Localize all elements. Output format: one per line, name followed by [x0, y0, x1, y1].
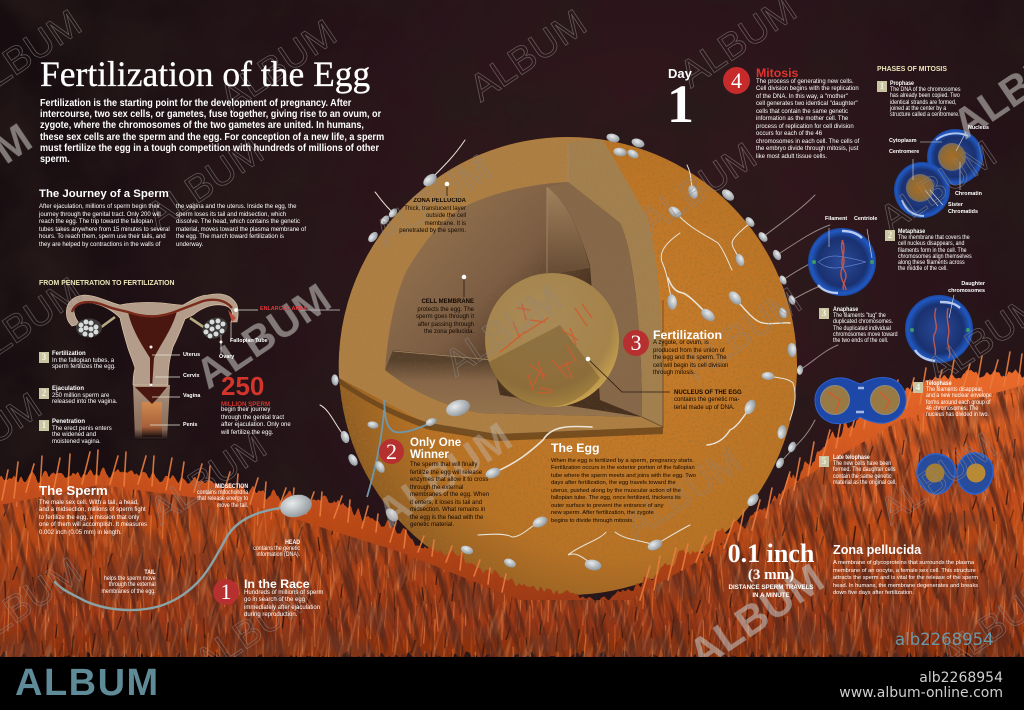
- label: midsection: contains mitochondria: [197, 489, 248, 496]
- day counter: Day: [668, 66, 692, 81]
- fertilization text: [653, 340, 728, 376]
- sperm text: and a midsection, millions of sperm fight: [39, 507, 146, 513]
- egg text: uterus, pushed along by the muscular action of the: [551, 488, 681, 494]
- watermark outlines: ALBUM: [677, 280, 809, 388]
- cell diagram: metaphase: [808, 228, 876, 296]
- in the race text: [244, 590, 323, 618]
- fertilization text: through mitosis.: [653, 370, 695, 376]
- mitosis text: The process of generating new cells.: [756, 78, 854, 84]
- fertilization text: produced from the union of: [653, 348, 725, 354]
- step 2: 250 million sperm are: [52, 392, 109, 398]
- step 2: Ejaculation: [52, 386, 84, 392]
- winner text: through the external: [410, 484, 463, 490]
- phase 4 telophase: The filaments disappear,: [926, 386, 983, 393]
- heading: mitosis: Mitosis: [756, 66, 798, 80]
- egg text: fallopian tube. The egg, once fertilized, thickens its: [551, 495, 681, 501]
- step 1: 1: [42, 420, 46, 430]
- text: Vagina: [183, 393, 200, 399]
- watermark outlines: ALBUM: [872, 133, 1004, 241]
- sperm text: 0.002 inch (0.05 mm) in length.: [39, 530, 122, 536]
- number 4: 4: [731, 68, 742, 93]
- heading: fertilization: Fertilization: [653, 328, 722, 342]
- phase 3 anaphase: the two ends of the cell.: [833, 337, 888, 344]
- nucleus label: [674, 390, 742, 410]
- step 2: released into the vagina.: [52, 399, 117, 405]
- phase 5 late telophase: The new cells have been: [833, 460, 891, 467]
- phase 3 anaphase: duplicated chromosomes.: [833, 318, 893, 325]
- journey text column 2: the egg. The march toward fertilization is: [176, 234, 284, 240]
- number 2: 2: [386, 439, 397, 464]
- phase 4 telophase: and a new nuclear envelope: [926, 392, 992, 399]
- watermark outlines: ALBUM: [617, 440, 749, 548]
- egg text: days after fertilization, the egg travels toward the: [551, 480, 676, 486]
- label: daughter chromosomes: Daughter: [961, 281, 985, 287]
- phase 1 prophase: 1: [880, 81, 884, 91]
- stat: 0.1 inch: IN A MINUTE: [752, 592, 790, 598]
- day counter: 1: [667, 74, 694, 134]
- zona pellucida text: head. In humans, the membrane degenerates and breaks: [833, 582, 978, 588]
- label: midsection: move the tail.: [217, 502, 248, 509]
- intro text: these sex cells are the sperm and the egg. For conception of a new life, a sperm: [40, 132, 384, 143]
- cell membrane label: [416, 298, 474, 335]
- phase 5 late telophase: material as the original cell.: [833, 479, 897, 486]
- footer band: [0, 657, 1024, 710]
- heading: the egg: The Egg: [551, 441, 600, 455]
- large sperm: [55, 492, 314, 610]
- phase 2 metaphase: The membrane that covers the: [898, 234, 970, 241]
- phase 1 prophase: structure called a centromere.: [890, 111, 960, 118]
- label: head: [253, 539, 300, 558]
- heading: only one winner: Only One: [410, 437, 461, 449]
- stat: 0.1 inch: [728, 539, 814, 598]
- number 2: [379, 439, 404, 464]
- zona pellucida label: penetrated by the sperm.: [399, 228, 466, 234]
- egg text: outer surface to prevent the entrance of any: [551, 502, 663, 508]
- label: head: HEAD: [285, 539, 300, 546]
- orange fur field: [0, 352, 1024, 673]
- phase 1 prophase: The DNA of the chromosomes: [890, 86, 960, 93]
- stat: 250 million sperm: after ejaculation. Only one: [221, 422, 291, 428]
- nucleus label: terial made up of DNA.: [674, 404, 735, 410]
- intro text: intercourse, two sex cells, or gametes, fuse together, giving rise to an ovum, or: [40, 109, 381, 120]
- phase 1 prophase: Prophase: [890, 80, 914, 87]
- image id overlay: alb2268954: [895, 630, 994, 649]
- watermark outlines: ALBUM: [187, 576, 319, 684]
- in the race text: immediately after ejaculation: [244, 604, 320, 610]
- cell membrane label: the zona pellucida.: [424, 329, 474, 335]
- number 3: [623, 330, 649, 356]
- text: Chromatin: [955, 191, 982, 197]
- phase 3 anaphase: Anaphase: [833, 306, 858, 313]
- heading: penetration to fertilization: FROM PENETRATION TO FERTILIZATION: [39, 280, 175, 287]
- journey text column 2: [176, 204, 306, 248]
- zona pellucida text: A membrane of glycoproteins that surrounds the plasma: [833, 560, 974, 566]
- phase 2 metaphase: filaments form in the cell. The: [898, 247, 967, 254]
- text: Cervix: [183, 373, 199, 379]
- cell labels: Nucleus: [968, 125, 989, 131]
- journey text column 2: dissolve. The head, which contains the genetic: [176, 219, 300, 225]
- anatomy labels: Uterus: [183, 352, 200, 358]
- watermark outlines: ALBUM: [142, 425, 274, 533]
- zona pellucida label: membrane. It is: [425, 220, 466, 226]
- heading: zona pellucida: Zona pellucida: [833, 543, 921, 557]
- phase 3 anaphase: [819, 306, 898, 344]
- egg text: tube where the sperm meets and joins with the egg. Two: [551, 472, 696, 478]
- text: Chromatids: [948, 208, 978, 214]
- cell diagram: anaphase: [905, 295, 973, 363]
- label: head: contains the genetic: [253, 545, 300, 552]
- step 1: The erect penis enters: [52, 426, 112, 432]
- zona pellucida label: ZONA PELLUCIDA: [413, 198, 466, 204]
- zona pellucida text: membrane of an oocyte, a female sex cell. This structure: [833, 568, 976, 574]
- label: midsection: that release energy to: [197, 495, 248, 502]
- mitosis text: the embryo divide through mitosis, just: [756, 146, 858, 152]
- nucleus with chromosomes: [485, 273, 619, 407]
- nucleus label: NUCLEUS OF THE EGG: [674, 390, 742, 396]
- text: Centriole: [854, 216, 877, 222]
- step 1: Penetration: [52, 419, 85, 425]
- phase 3 anaphase: The filaments "tug" the: [833, 312, 886, 319]
- label: head: information (DNA).: [256, 551, 300, 558]
- step 1: the widened and: [52, 432, 96, 438]
- phase 5 late telophase: contain the same genetic: [833, 473, 891, 480]
- label: tail: membranes of the egg.: [102, 588, 156, 595]
- zona pellucida text: [833, 560, 978, 596]
- number 1: [213, 579, 239, 605]
- mitosis text: like most adult tissue cells.: [756, 154, 827, 160]
- phase 3 anaphase: chromosomes move toward: [833, 331, 898, 338]
- footer: album logo: ALBUM: [15, 662, 160, 704]
- phase 4 telophase: forms around each group of: [926, 399, 991, 406]
- phase 5 late telophase: formed. The daughter cells: [833, 466, 895, 473]
- cell membrane label: protects the egg. The: [417, 306, 474, 312]
- cell diagram: telophase: [815, 377, 906, 424]
- winner text: enzymes that allow it to cross: [410, 477, 488, 483]
- watermark outlines: ALBUM: [367, 147, 499, 255]
- phase 2 metaphase: the middle of the cell.: [898, 265, 948, 272]
- intro text: must fertilize the egg in a tough competition with hundreds of millions of other: [40, 143, 379, 154]
- intro text: [40, 98, 384, 165]
- winner text: midsection. What remains in: [410, 507, 485, 513]
- step 2: [39, 386, 117, 405]
- winner text: membranes of the egg. When: [410, 492, 489, 498]
- phase 1 prophase: has already been copied. Two: [890, 92, 960, 99]
- step 1: [39, 418, 112, 445]
- stat: 250 million sperm: MILLION SPERM: [221, 400, 270, 408]
- phase 4 telophase: 4: [916, 382, 920, 392]
- watermark outlines: ALBUM: [139, 130, 271, 238]
- zona pellucida text: down five days after fertilization.: [833, 590, 914, 596]
- number 1: 1: [220, 579, 232, 604]
- mitosis text: process of replication for cell division: [756, 124, 854, 130]
- footer: website: www.album-online.com: [839, 685, 1003, 701]
- step 3: 3: [42, 352, 46, 362]
- fertilization text: the egg and the sperm. The: [653, 355, 727, 361]
- egg text: When the egg is fertilized by a sperm, pregnancy starts.: [551, 458, 694, 464]
- uterus anatomy diagram: [66, 294, 340, 440]
- step 3: [39, 350, 116, 370]
- label: tail: TAIL: [145, 569, 156, 576]
- egg sphere: [339, 137, 799, 595]
- phase 3 anaphase: The duplicated individual: [833, 325, 891, 332]
- egg callout lines: [445, 182, 670, 392]
- in the race text: during reproduction.: [244, 612, 297, 618]
- journey text column 1: journey through the genital tract. Only 200 will: [39, 212, 161, 218]
- text: Penis: [183, 422, 197, 428]
- watermark outlines: ALBUM: [212, 12, 344, 120]
- label: midsection: MIDSECTION: [215, 483, 248, 490]
- label: daughter chromosomes: chromosomes: [948, 288, 985, 294]
- egg text: Fertilization occurs in the exterior portion of the fallopian: [551, 465, 695, 471]
- sperm text: The male sex cell. With a tail, a head,: [39, 500, 139, 506]
- phase 1 prophase: joined at the center by a: [890, 105, 946, 112]
- phase 5 late telophase: Late telophase: [833, 454, 870, 461]
- phase 2 metaphase: chromosomes align themselves: [898, 253, 972, 260]
- watermark solid: ALBUM: [368, 413, 520, 537]
- phase 4 telophase: nucleus has divided in two.: [926, 411, 989, 418]
- in the race text: Hundreds of millions of sperm: [244, 590, 323, 596]
- text: Sister: [948, 202, 963, 208]
- intro text: sperm.: [40, 154, 70, 165]
- phase 2 metaphase: cell nucleus disappears, and: [898, 240, 964, 247]
- winner text: [410, 462, 489, 528]
- text: Fallopian Tube: [230, 338, 268, 344]
- watermark outlines: ALBUM: [462, 2, 594, 110]
- phase 5 late telophase: [819, 454, 897, 486]
- footer: image id: alb2268954: [919, 670, 1003, 686]
- journey text column 1: they are helped by contractions in the walls of: [39, 242, 160, 248]
- journey text column 1: hours. To reach them, sperm use their tails, and: [39, 234, 166, 240]
- text: Filament: [825, 216, 847, 222]
- journey text column 2: underway.: [176, 242, 203, 248]
- nucleus label: contains the genetic ma-: [674, 397, 739, 403]
- phase 4 telophase: Telophase: [926, 380, 952, 387]
- winner text: it enters, it loses its tail and: [410, 500, 482, 506]
- heading: the sperm: The Sperm: [39, 483, 108, 498]
- stat: 0.1 inch: 0.1 inch: [728, 539, 814, 568]
- phase 5 late telophase: 5: [822, 456, 826, 466]
- journey text column 1: tubes takes anywhere from 15 minutes to several: [39, 226, 170, 232]
- phase 2 metaphase: Metaphase: [898, 228, 925, 235]
- stat: 250 million sperm: will fertilize the egg.: [221, 430, 273, 436]
- watermark solid: ALBUM: [187, 274, 339, 398]
- winner text: The sperm that will finally: [410, 462, 477, 468]
- watermark outlines: ALBUM: [632, 135, 764, 243]
- mitosis text: [756, 78, 860, 160]
- intro text: Fertilization is the starting point for the development of pregnancy. After: [40, 98, 351, 108]
- sperm text: one of them will accomplish. It measures: [39, 522, 147, 528]
- mitosis text: information as the mother cell. The: [756, 116, 848, 122]
- cell membrane label: CELL MEMBRANE: [421, 299, 474, 305]
- zona pellucida label: [379, 198, 466, 452]
- cell membrane label: after passing through: [418, 322, 474, 328]
- fertilization text: A zygote, or ovum, is: [653, 340, 709, 346]
- winner text: the egg is the head with the: [410, 514, 483, 520]
- sperm text: to fertilize the egg, a mission that only: [39, 514, 139, 520]
- step 3: In the fallopian tubes, a: [52, 358, 114, 364]
- stat: 0.1 inch: DISTANCE SPERM TRAVELS: [728, 584, 814, 590]
- watermark solid: ALBUM: [680, 554, 832, 678]
- label: midsection: [197, 483, 248, 509]
- zona pellucida text: attracts the sperm and is vital for the release of the sperm: [833, 575, 978, 581]
- winner text: fertilize the egg will release: [410, 470, 482, 476]
- step 2: 2: [42, 388, 46, 398]
- phase 1 prophase: [877, 80, 960, 118]
- watermark outlines: ALBUM: [872, 425, 1004, 533]
- mitosis text: occurs for each of the 46: [756, 131, 822, 137]
- heading: in the race: In the Race: [244, 577, 310, 591]
- stat: 250 million sperm: begin their journey: [221, 407, 270, 413]
- sperm text: [39, 500, 147, 536]
- stat: 250 million sperm: [221, 371, 291, 436]
- journey text column 2: sperm loses its tail and midsection, which: [176, 212, 286, 218]
- text: Centromere: [889, 149, 919, 155]
- label: tail: helps the sperm move: [104, 575, 156, 582]
- step 3: sperm fertilizes the egg.: [52, 364, 116, 370]
- heading: only one winner: [410, 437, 461, 461]
- step 1: moistened vagina.: [52, 439, 101, 445]
- heading: only one winner: Winner: [410, 449, 449, 461]
- mitosis text: chromosomes in each cell. The cells of: [756, 138, 859, 144]
- label: tail: [102, 569, 156, 595]
- number 3: 3: [630, 330, 642, 355]
- phase 2 metaphase: 2: [888, 230, 892, 240]
- in the race text: go in search of the egg: [244, 597, 305, 603]
- watermark outlines: ALBUM: [437, 277, 569, 385]
- number 4: [723, 67, 750, 94]
- phase 2 metaphase: along these filaments across: [898, 259, 965, 266]
- egg text: new sperm. After fertilization, the zygote: [551, 510, 654, 516]
- mitosis text: cell generates two identical "daughter": [756, 101, 858, 107]
- journey text column 2: material, moves toward the plasma membrane of: [176, 226, 306, 232]
- heading: phases of mitosis: PHASES OF MITOSIS: [877, 66, 947, 73]
- cell diagram: late telophase: [917, 453, 993, 494]
- cell diagram: prophase: [894, 129, 983, 218]
- phase 4 telophase: [913, 380, 992, 418]
- phase 3 anaphase: 3: [822, 308, 826, 318]
- text: ENLARGED AREA: [260, 306, 307, 312]
- mitosis text: Cell division begins with the replication: [756, 86, 859, 92]
- stat: 250 million sperm: through the genital tract: [221, 414, 284, 420]
- label: tail: through the external: [109, 581, 156, 588]
- cutaway section of the egg: [339, 137, 669, 441]
- egg text: begins to divide through mitosis.: [551, 518, 634, 524]
- sperm cells on the egg: [320, 132, 845, 572]
- journey text column 1: After ejaculation, millions of sperm begin their: [39, 204, 160, 210]
- stat: 250 million sperm: 250: [221, 371, 264, 401]
- step 3: Fertilization: [52, 351, 86, 357]
- text: Ovary: [219, 354, 234, 360]
- zona pellucida label: Thick, translucent layer: [404, 206, 466, 212]
- egg text: [551, 458, 696, 524]
- zona pellucida label: outside the cell: [426, 213, 466, 219]
- title: Fertilization of the Egg: [40, 54, 370, 94]
- intro text: zygote, where the chromosomes of the two gametes are united. In humans,: [40, 120, 364, 131]
- mitosis text: of the DNA. In this way, a "mother": [756, 94, 848, 100]
- journey text column 2: the vagina and the uterus. Inside the egg, the: [176, 204, 296, 210]
- cell membrane label: sperm goes through it: [416, 314, 474, 320]
- winner text: genetic material.: [410, 522, 454, 528]
- phase 2 metaphase: [885, 228, 972, 272]
- heading: journey: The Journey of a Sperm: [39, 188, 169, 200]
- text: Cytoplasm: [889, 138, 917, 144]
- fur tips along the edge: [2, 352, 1022, 600]
- mitosis text: cells that contain the same genetic: [756, 108, 848, 114]
- label: daughter chromosomes: [948, 281, 985, 294]
- stat: 0.1 inch: (3 mm): [748, 567, 794, 583]
- journey text column 1: [38, 204, 170, 248]
- phase 1 prophase: identical strands are formed,: [890, 99, 956, 106]
- phase 4 telophase: 46 chromosomes. The: [926, 405, 978, 412]
- journey text column 1: reach the egg. The trip toward the fallopian: [39, 219, 153, 225]
- fertilization text: cell will begin its cell division: [653, 362, 728, 368]
